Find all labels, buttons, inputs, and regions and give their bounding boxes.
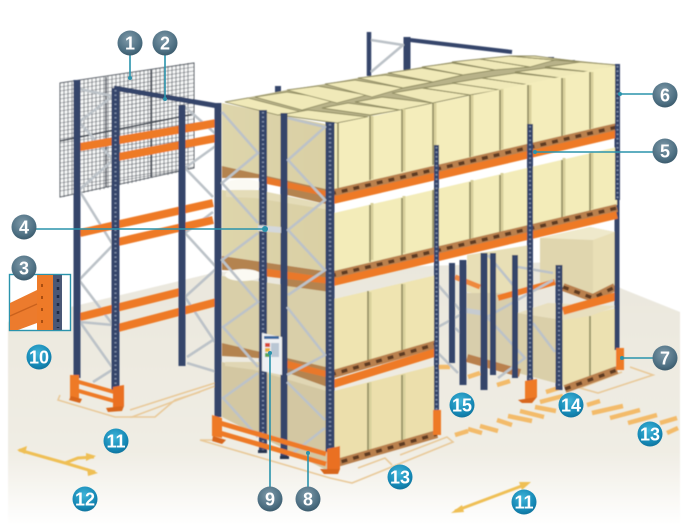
front face loads bottom level <box>330 365 437 462</box>
stacked pallet loads: side faces <box>222 103 330 472</box>
badge 12: 12 <box>75 490 95 510</box>
safety sign plate <box>262 333 282 375</box>
badge 1 <box>118 30 142 56</box>
badge 2: 2 <box>160 34 170 54</box>
badge 5 <box>652 138 678 164</box>
left end protector <box>69 375 124 412</box>
badge 1: 1 <box>125 34 135 54</box>
badge 14: 14 <box>561 396 581 416</box>
front face loads second level <box>330 147 617 272</box>
badge 10 <box>26 344 52 370</box>
badge 13 centre <box>388 464 412 490</box>
badge 11 right: 11 <box>514 492 534 512</box>
badge 14 <box>558 392 584 418</box>
floor markings: dashes <box>438 367 678 435</box>
front frame bracing <box>222 112 325 453</box>
pallets <box>330 127 617 465</box>
badge 7: 7 <box>660 348 670 368</box>
back section boxes seen through aisle <box>455 227 617 389</box>
badge 5: 5 <box>660 142 670 162</box>
warehouse floor <box>8 262 680 526</box>
front end protector <box>212 415 340 474</box>
left section orange beams <box>80 123 217 328</box>
top surfaces of loads <box>225 56 617 123</box>
front face loads top level <box>330 65 617 192</box>
inset: beam connector detail <box>10 274 70 330</box>
badge 9: 9 <box>265 490 275 510</box>
main uprights <box>218 64 618 457</box>
pallets between side loads, level 2 <box>222 256 330 292</box>
left section uprights <box>77 80 218 392</box>
front face loads third level <box>330 275 437 372</box>
badge 13 right: 13 <box>640 424 660 444</box>
badge 11 right <box>512 490 536 514</box>
badge 13 right <box>638 422 662 446</box>
badge 10: 10 <box>29 348 49 368</box>
badge 12 <box>72 486 98 512</box>
badge 6: 6 <box>660 86 670 106</box>
badge 8: 8 <box>303 490 313 510</box>
back rack uprights and top beam <box>278 32 572 94</box>
aisle frames and bracing <box>438 65 617 390</box>
orange beams front <box>330 134 617 385</box>
leader lines <box>34 54 653 487</box>
column protectors <box>433 348 624 435</box>
badge 11 left <box>104 428 128 454</box>
badge 8 <box>296 486 320 512</box>
badge 9 <box>258 486 282 512</box>
badge 4 <box>12 214 36 240</box>
badge 3: 3 <box>19 258 29 278</box>
badge 6 <box>652 82 678 108</box>
left frame bracing <box>79 89 217 382</box>
pallets between side loads, level 3 <box>222 343 330 392</box>
pallets between side loads, level 1 <box>222 166 330 210</box>
badge 13 centre: 13 <box>390 468 410 488</box>
badge 15 <box>450 392 474 418</box>
badge 4: 4 <box>19 218 29 238</box>
floor markings: outlines <box>58 367 653 483</box>
badge 15: 15 <box>452 396 472 416</box>
badge 3 <box>12 256 36 280</box>
floor arrow left <box>17 446 98 476</box>
badge 2 <box>152 30 178 56</box>
floor arrow right <box>451 482 531 513</box>
wire mesh panel <box>60 63 194 197</box>
badge 11 left: 11 <box>106 432 126 452</box>
badge 7 <box>652 346 678 370</box>
